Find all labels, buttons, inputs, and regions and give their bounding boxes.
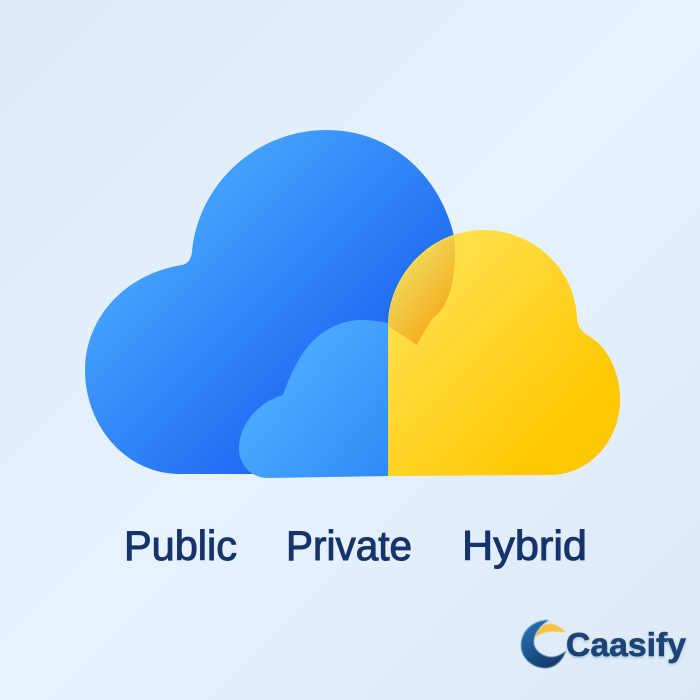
logo wordmark: Caasify	[566, 626, 687, 663]
public cloud	[85, 130, 454, 474]
private cloud	[239, 320, 388, 478]
label: private: Private	[286, 522, 412, 569]
label: hybrid: Hybrid	[462, 522, 587, 569]
cloud diagram	[85, 130, 620, 478]
label: public: Public	[124, 522, 237, 569]
icon: logo swoosh	[521, 620, 566, 668]
logo: Caasify	[521, 620, 687, 668]
labels	[124, 522, 587, 569]
overlap of public and hybrid clouds	[388, 236, 455, 345]
hybrid cloud	[388, 230, 620, 476]
